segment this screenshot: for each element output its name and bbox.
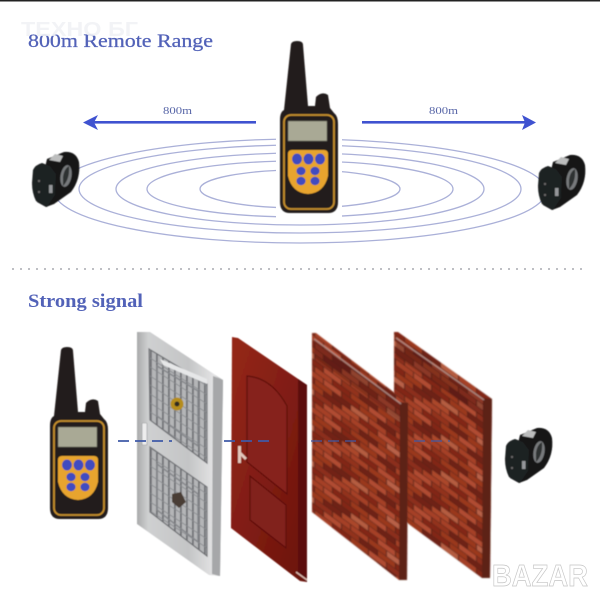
title: 800m Remote Range: 800m Remote Range bbox=[28, 32, 213, 52]
brick wall 1 bbox=[312, 333, 408, 580]
heading: Strong signal: Strong signal bbox=[28, 292, 143, 312]
wooden door bbox=[231, 337, 307, 582]
white gap behind top remote bbox=[276, 130, 342, 220]
top border line bbox=[0, 0, 600, 2]
arrow right bbox=[362, 115, 536, 130]
icon: collar left bbox=[32, 152, 79, 207]
icon: remote transmitter top bbox=[280, 41, 338, 213]
silver security door bbox=[137, 332, 223, 576]
section divider dotted bbox=[12, 268, 586, 270]
brick wall 2 bbox=[394, 332, 492, 578]
watermark: BAZAR logo: BAZAR bbox=[492, 558, 588, 593]
icon: collar right bbox=[538, 155, 585, 210]
range label right: 800m: 800m bbox=[429, 106, 458, 117]
arrow left bbox=[83, 115, 256, 130]
signal range rings bbox=[54, 139, 546, 243]
icon: collar receiver bottom bbox=[505, 428, 552, 483]
watermark: ТЕХНО БГ: ТЕХНО БГ bbox=[21, 19, 138, 41]
icon: remote transmitter bottom bbox=[50, 347, 108, 519]
range label left: 800m: 800m bbox=[163, 106, 192, 117]
signal dashed line through obstacles bbox=[118, 440, 450, 442]
